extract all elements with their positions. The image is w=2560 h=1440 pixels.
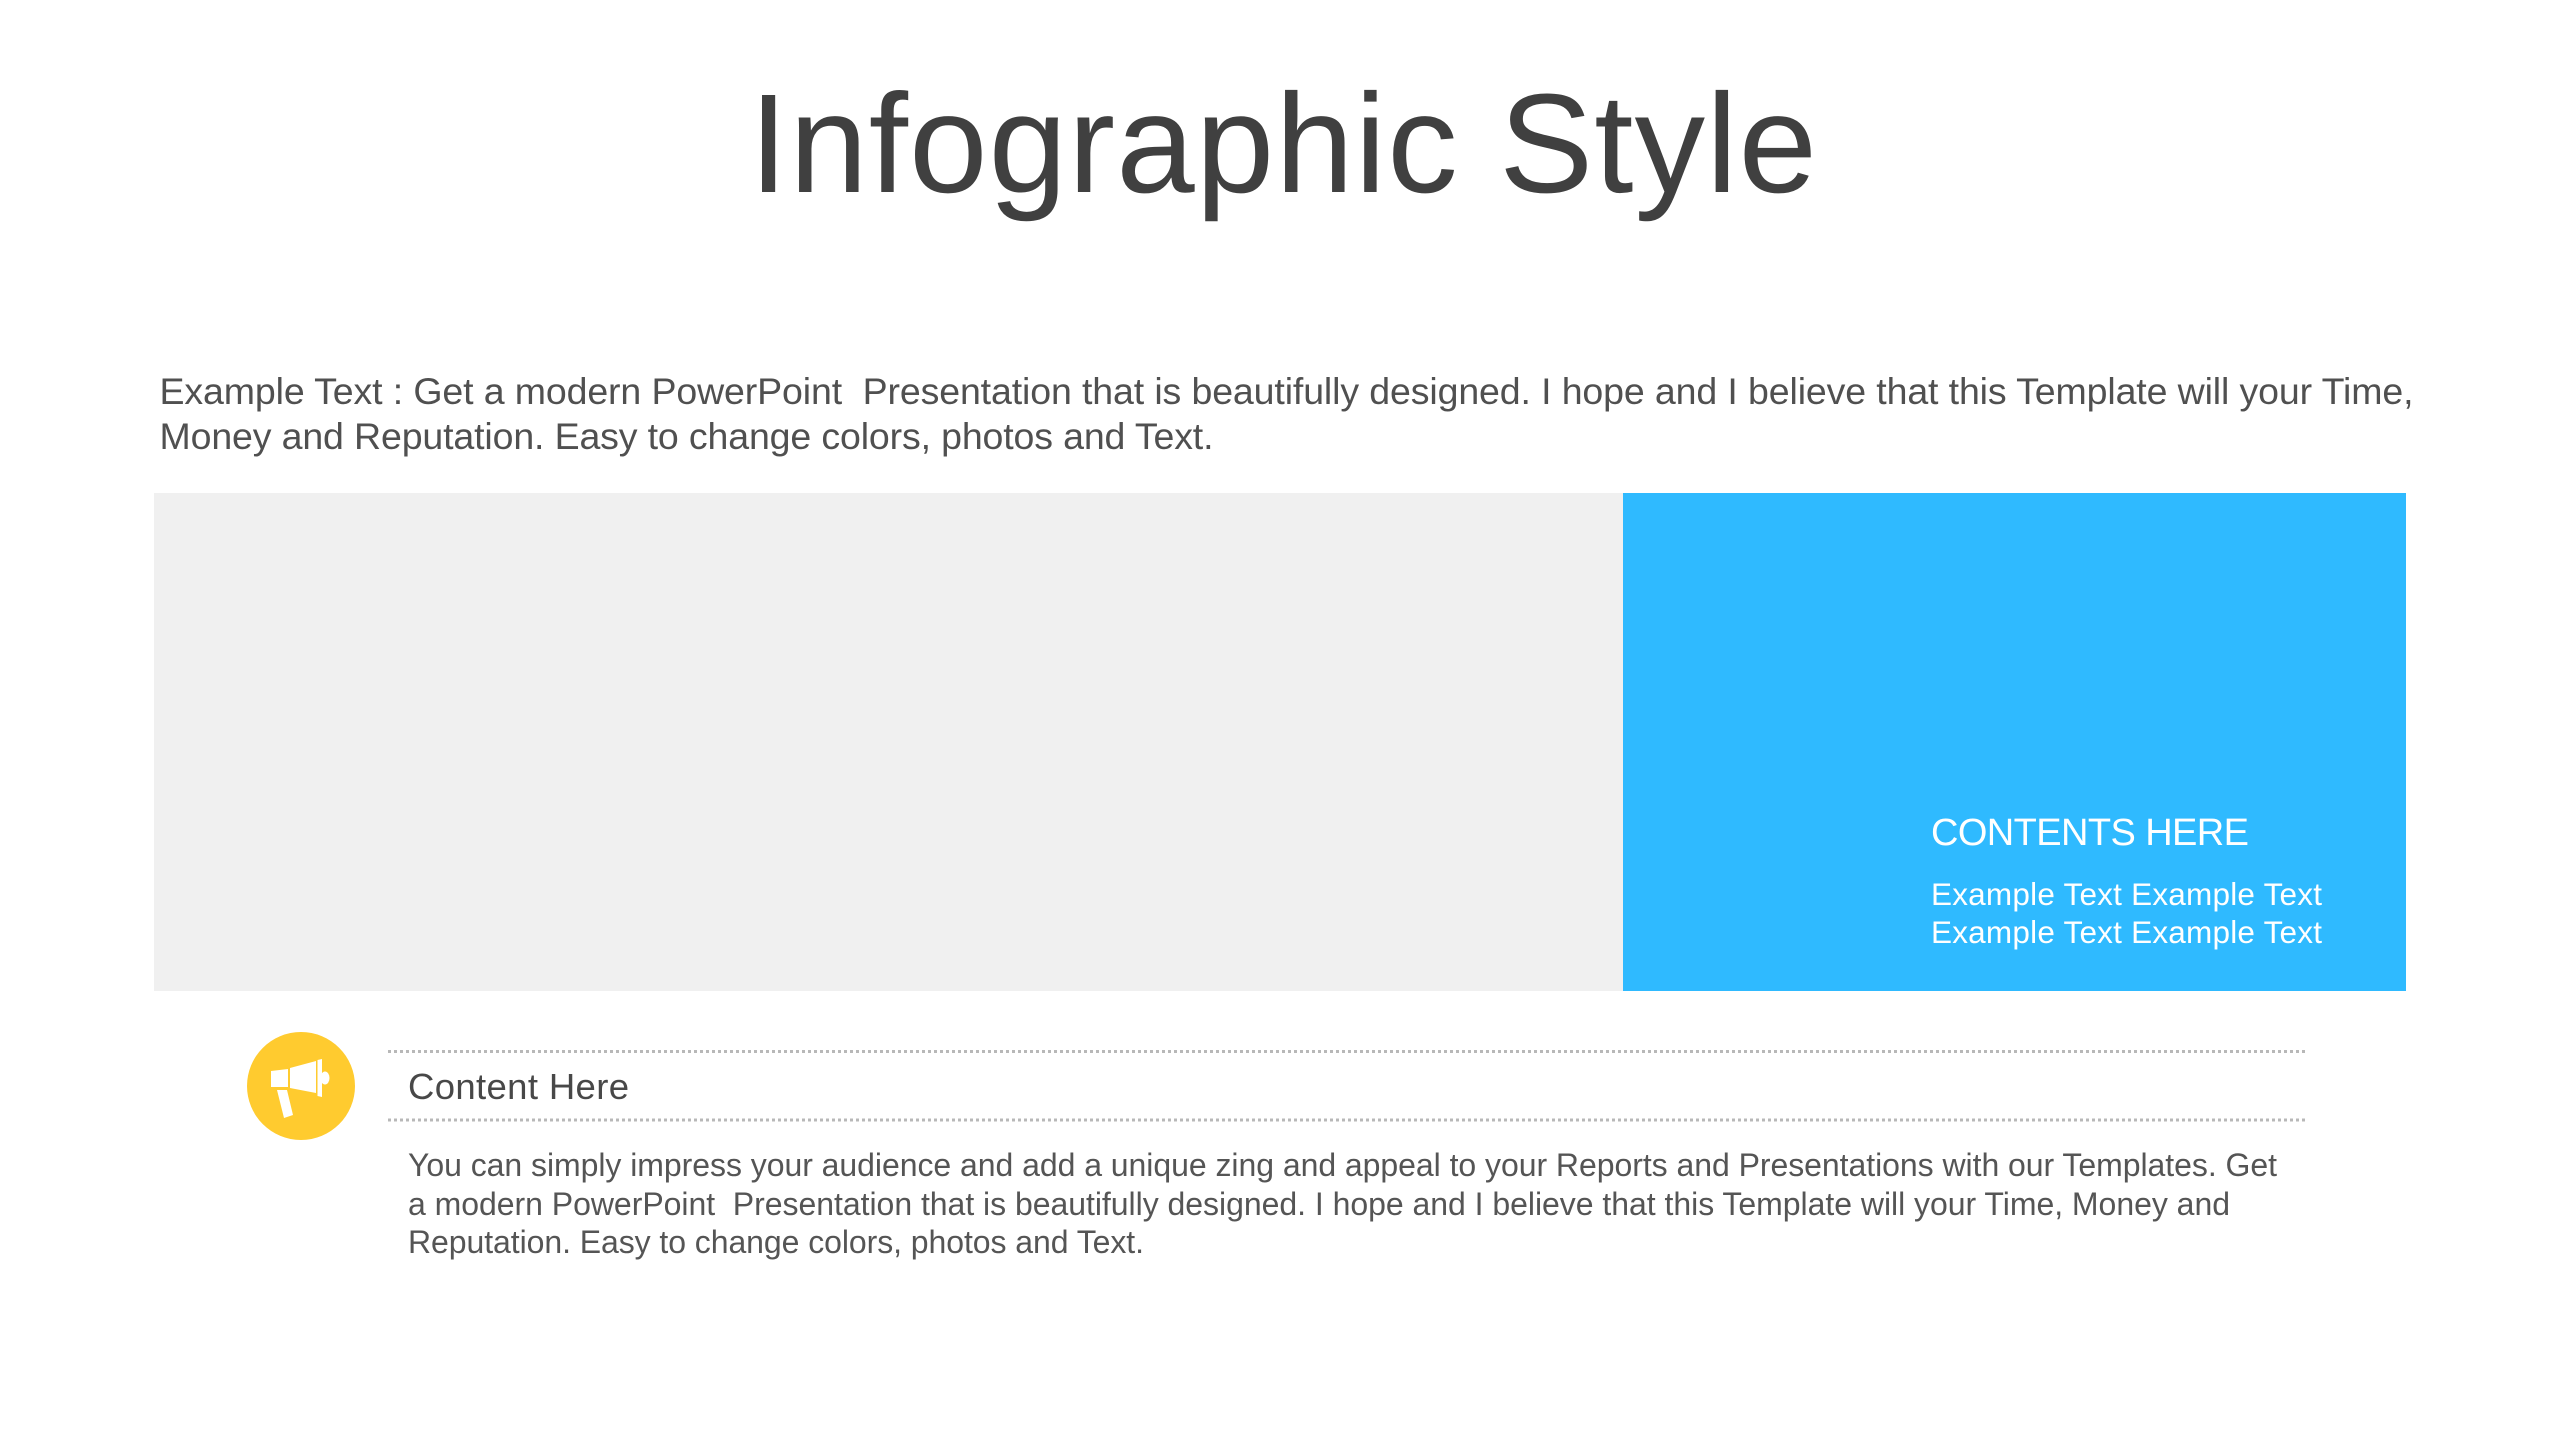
content body text: a modern PowerPoint Presentation that is beautifully designed. I hope and I believe that this Template will your Time, Money and [408,1186,2230,1222]
content body text: Reputation. Easy to change colors, photos and Text. [408,1224,1144,1260]
blue panel heading: CONTENTS HERE [1931,812,2249,854]
dotted rule above heading [388,1050,2305,1053]
title: Infographic Style [749,64,1817,222]
blue panel text: Example Text Example Text [1931,876,2322,912]
content body text [408,1147,2277,1260]
panel: grey placeholder [154,493,1623,991]
panel: blue contents [1623,493,2406,991]
blue panel text [1931,876,2322,950]
blue panel text: Example Text Example Text [1931,914,2322,950]
content heading: Content Here [408,1066,629,1107]
intro paragraph: Example Text : Get a modern PowerPoint Presentation that is beautifully designed. I hope and I believe that this Template will your Time, [160,370,2414,412]
intro paragraph: Money and Reputation. Easy to change colors, photos and Text. [160,415,1214,457]
intro paragraph [160,370,2414,457]
dotted rule below heading [388,1118,2305,1122]
content body text: You can simply impress your audience and add a unique zing and appeal to your Reports and Presentations with our Templates. Get [408,1147,2277,1183]
icon: megaphone in yellow circle [247,1032,355,1140]
